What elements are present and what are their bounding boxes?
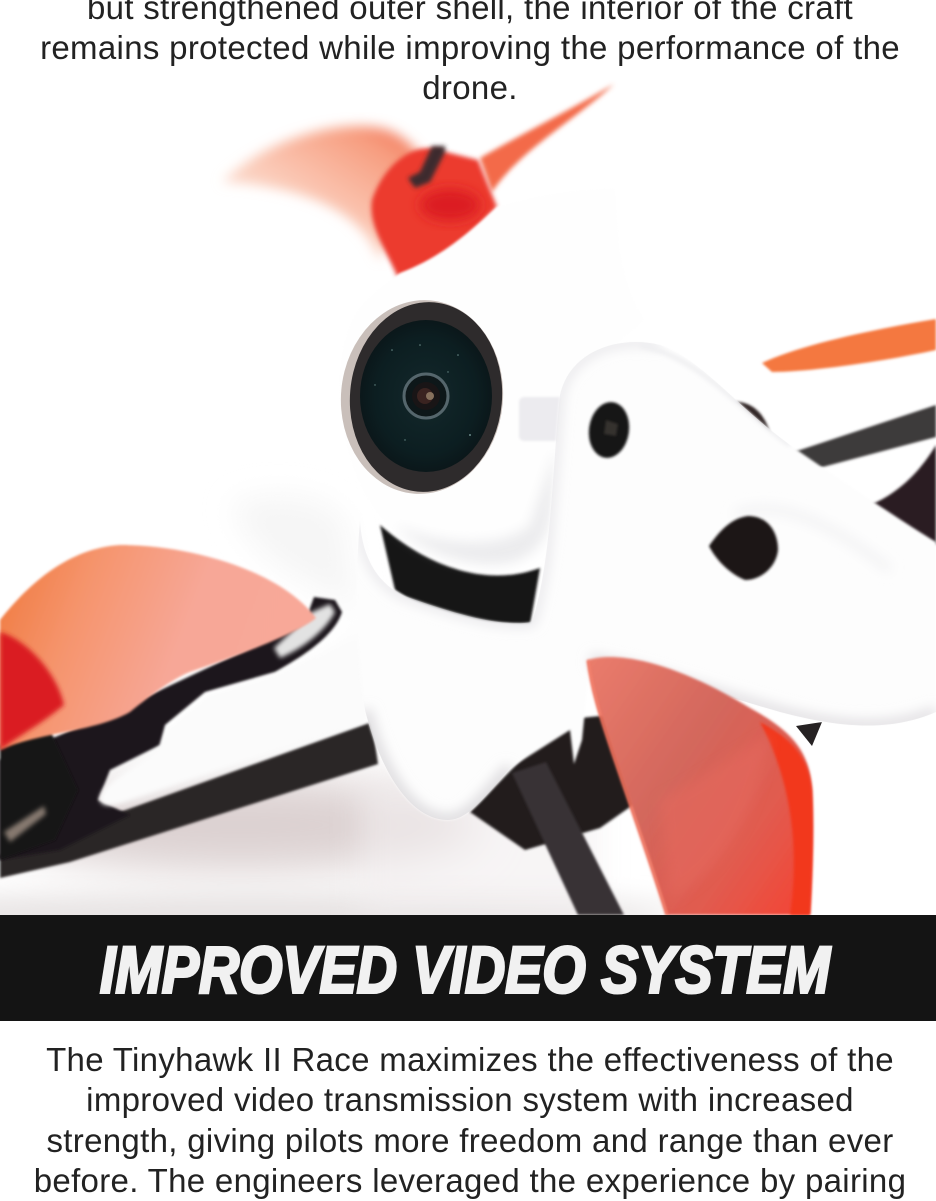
left carbon arm and motor	[0, 597, 378, 878]
top propeller	[222, 84, 614, 278]
screw	[585, 399, 633, 461]
heading band	[0, 915, 936, 1021]
camera lens	[333, 293, 511, 501]
bottom text block	[34, 1041, 906, 1199]
drone photo	[0, 84, 936, 915]
shell vent	[709, 516, 778, 580]
bottom carbon and gimbal	[380, 525, 822, 915]
soft rear frame	[100, 495, 370, 800]
side button	[519, 397, 564, 441]
top text block: remains protected while improving the performance of the	[40, 29, 900, 66]
camera body shell	[339, 188, 645, 566]
left propeller	[0, 545, 316, 750]
top text block	[40, 0, 900, 106]
bottom text block: The Tinyhawk II Race maximizes the effectiveness of the	[46, 1041, 894, 1078]
top text block: drone.	[422, 69, 518, 106]
front propeller	[588, 657, 813, 915]
bottom text block: improved video transmission system with increased	[86, 1081, 854, 1118]
right carbon arms	[722, 402, 936, 545]
bottom text block: strength, giving pilots more freedom and range than ever	[46, 1122, 894, 1159]
right propeller blade	[762, 319, 936, 372]
bottom text block: before. The engineers leveraged the experience by pairing	[34, 1162, 906, 1199]
main white canopy	[357, 342, 936, 820]
table surface	[0, 777, 680, 937]
